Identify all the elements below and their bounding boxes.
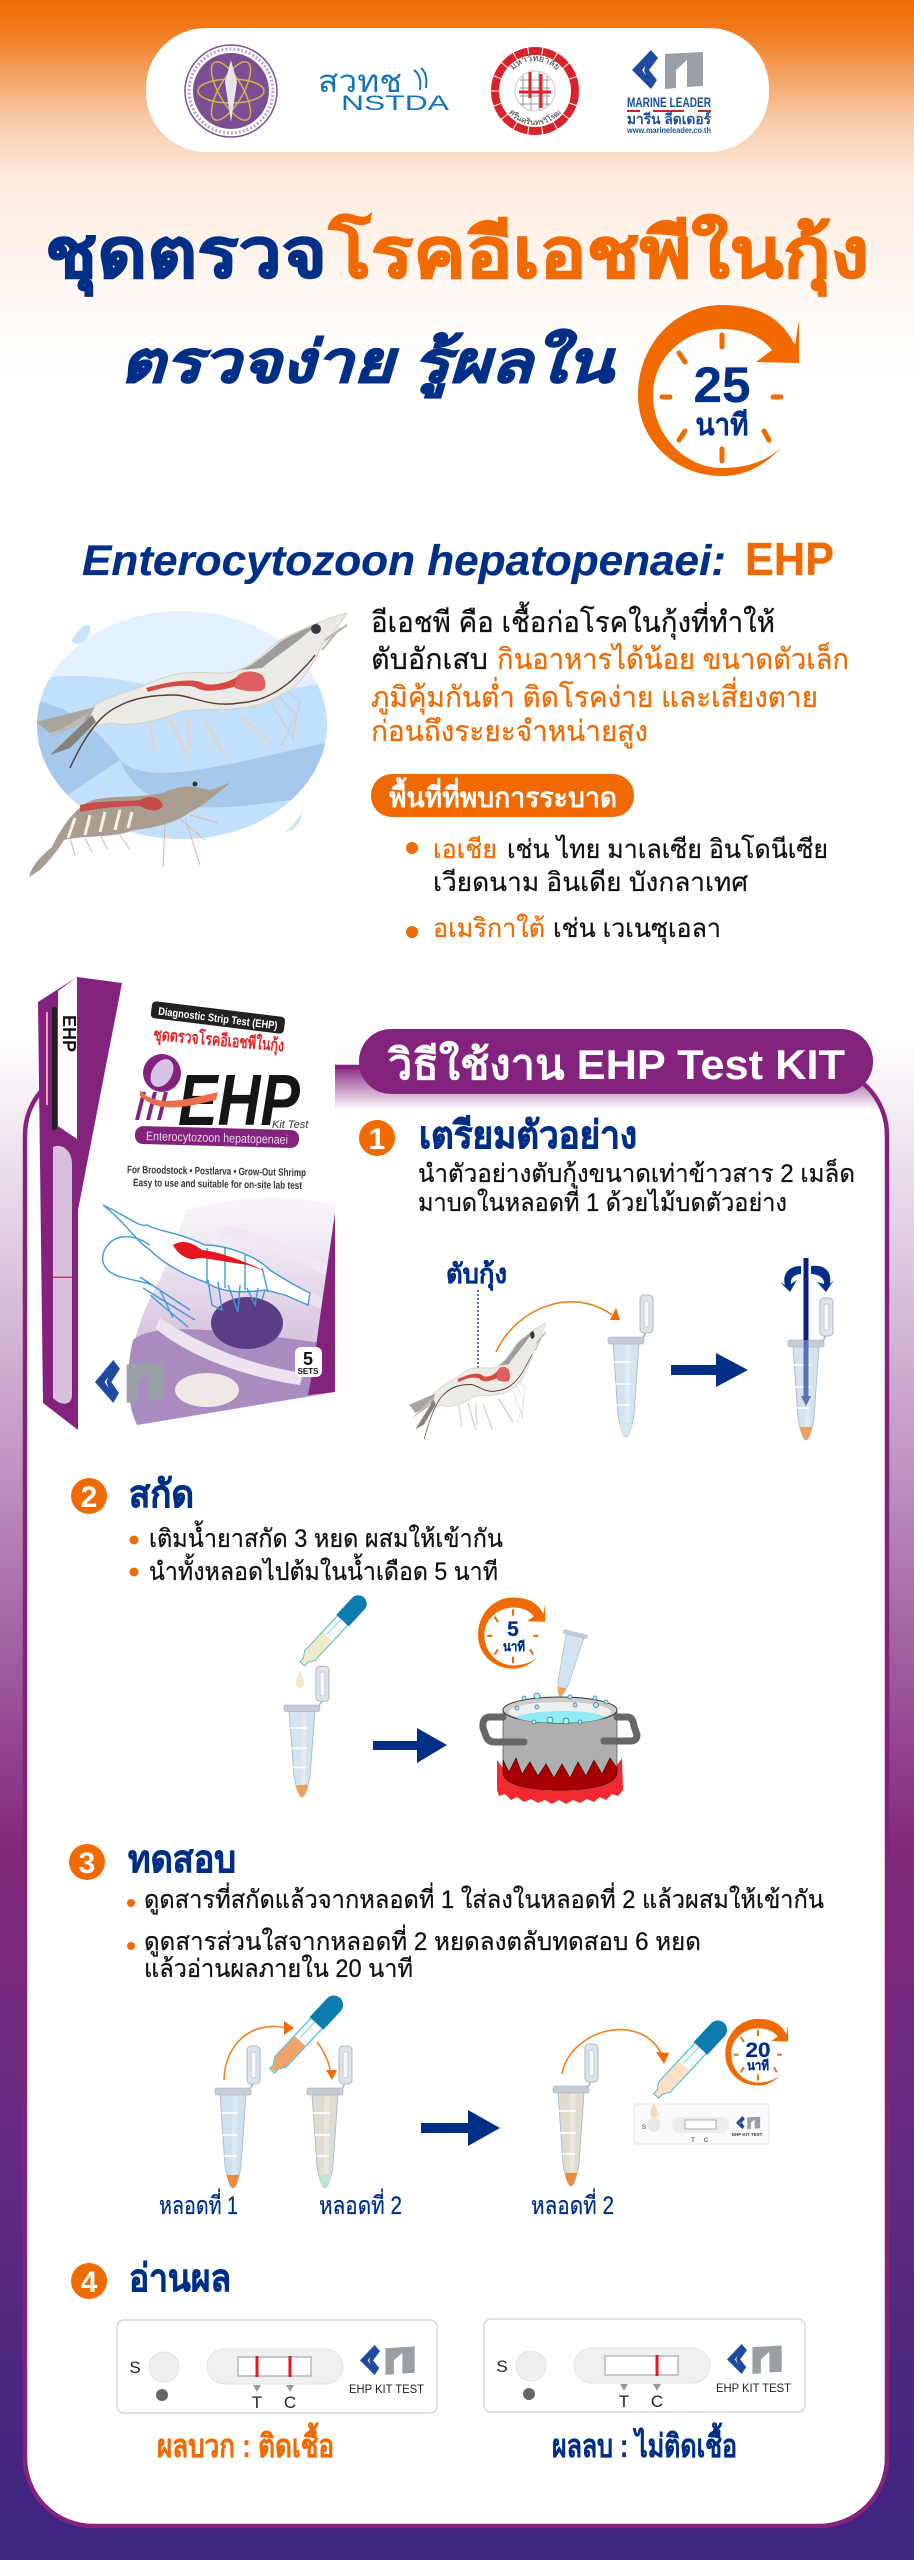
logo: Marine Leader bbox=[626, 50, 711, 135]
heading: EHP: EHP bbox=[745, 533, 834, 585]
result: negative: ผลลบ : ไม่ติดเชื้อ bbox=[552, 2422, 737, 2464]
step number 4: 4 bbox=[81, 2266, 98, 2299]
logo: ministry seal bbox=[185, 45, 277, 137]
text: EHP description: อีเอชพี คือ เชื้อก่อโรคในกุ้งที่ทำให้ bbox=[371, 601, 775, 640]
box illustration: blue shrimp outline bbox=[103, 1205, 310, 1327]
step number 1: 1 bbox=[369, 1123, 385, 1156]
illustration: small shrimp bbox=[29, 782, 230, 877]
title bbox=[45, 212, 869, 297]
arrow: navy bbox=[671, 1353, 748, 1387]
illustration: floating tube bbox=[548, 1629, 588, 1699]
illustration: water circle bbox=[37, 611, 327, 839]
box logo: EHP: Kit Test bbox=[272, 1119, 309, 1131]
panel title: how to use EHP Test KIT bbox=[359, 1029, 873, 1094]
step 1 text: นำตัวอย่างตับกุ้งขนาดเท่าข้าวสาร 2 เมล็ด bbox=[418, 1158, 855, 1189]
illustration: tube 2 result bbox=[553, 2044, 598, 2186]
test card: negative: S bbox=[496, 2357, 508, 2376]
logo: university seal bbox=[491, 47, 579, 135]
list: outbreak regions: เช่น เวเนซุเอลา bbox=[553, 913, 721, 944]
illustration: small test cassette bbox=[634, 2103, 769, 2144]
icon: 5 minute clock: นาที bbox=[503, 1639, 525, 1654]
box logo: EHP bbox=[135, 1054, 309, 1141]
step number 3 bbox=[69, 1844, 105, 1880]
logo: university seal: ศรีนครินทรวิโรฒ bbox=[509, 110, 561, 125]
illustration: tube 2 bbox=[307, 2046, 352, 2188]
step 4: read result bbox=[71, 2258, 805, 2464]
step number 1 bbox=[359, 1120, 395, 1156]
step number 2: 2 bbox=[81, 1481, 97, 1514]
step number 3: 3 bbox=[79, 1847, 95, 1880]
icon: 5 minute clock bbox=[478, 1598, 545, 1669]
step 1 text bbox=[418, 1158, 855, 1217]
illustration: tube with pestle bbox=[780, 1258, 834, 1440]
box logo: EHP: EHP bbox=[178, 1061, 301, 1141]
step 2: extract bbox=[71, 1474, 637, 1804]
step 1 text: มาบดในหลอดที่ 1 ด้วยไม้บดตัวอย่าง bbox=[418, 1185, 787, 1217]
box text: uses: Easy to use and suitable for on-site lab test bbox=[133, 1177, 303, 1192]
logo bar bbox=[146, 28, 769, 152]
icon: drop bbox=[296, 1671, 304, 1688]
text: EHP description: ภูมิคุ้มกันต่ำ ติดโรคง่าย และเสี่ยงตาย bbox=[371, 677, 818, 715]
step 1 title: เตรียมตัวอย่าง bbox=[419, 1115, 637, 1157]
list: outbreak regions: เวียดนาม อินเดีย บังกลาเทศ bbox=[433, 867, 748, 897]
logo: NSTDA: NSTDA bbox=[341, 92, 449, 115]
step 3 list: แล้วอ่านผลภายใน 20 นาที bbox=[144, 1954, 413, 1983]
subtitle: ตรวจง่าย รู้ผลใน bbox=[120, 329, 616, 399]
arrow: navy bbox=[421, 2110, 500, 2146]
step 2 list: เติมน้ำยาสกัด 3 หยด ผสมให้เข้ากัน bbox=[149, 1520, 503, 1553]
box text: uses bbox=[127, 1164, 306, 1192]
arrow: navy bbox=[373, 1728, 447, 1763]
label: tube 1: หลอดที่ 1 bbox=[159, 2188, 238, 2220]
icon: 20 minute clock: นาที bbox=[747, 2058, 769, 2073]
step 1: prepare sample bbox=[359, 1115, 855, 1440]
text: EHP description: ตับอักเสบ bbox=[371, 644, 488, 676]
badge: outbreak areas: พื้นที่ที่พบการระบาด bbox=[389, 776, 617, 813]
illustration: small test cassette: C bbox=[704, 2138, 709, 2144]
test card: positive: T bbox=[252, 2393, 262, 2412]
label: tube 2: หลอดที่ 2 bbox=[319, 2188, 402, 2220]
box badge: 5 sets: 5 bbox=[303, 1349, 313, 1369]
list: outbreak regions: เช่น ไทย มาเลเซีย อินโดนีเซีย bbox=[507, 834, 828, 864]
step 4 title: อ่านผล bbox=[129, 2258, 231, 2300]
illustration: shrimp bbox=[409, 1323, 546, 1439]
logo: Marine Leader: MARINE LEADER bbox=[627, 94, 711, 110]
icon: 25 minute clock bbox=[638, 305, 799, 476]
heading: EHP: Enterocytozoon hepatopenaei: bbox=[82, 537, 726, 585]
step 2 list bbox=[130, 1520, 503, 1586]
panel title: how to use EHP Test KIT: วิธีใช้งาน EHP Test KIT bbox=[387, 1040, 845, 1088]
panel: how to use bbox=[25, 1067, 887, 2526]
illustration: dropper bbox=[649, 2017, 731, 2102]
list: outbreak regions: เอเชีย bbox=[433, 834, 497, 864]
illustration: dropper bbox=[296, 1592, 370, 1670]
test card: negative: T bbox=[619, 2392, 629, 2411]
step 3: test bbox=[69, 1839, 824, 2220]
test card: positive: C bbox=[284, 2393, 296, 2412]
box text: uses: For Broodstock • Postlarva • Grow-Out Shrimp bbox=[127, 1164, 306, 1179]
logo: NSTDA: สวทช bbox=[318, 64, 402, 99]
result: positive: ผลบวก : ติดเชื้อ bbox=[157, 2422, 334, 2464]
box label: diagnostic pill: Diagnostic Strip Test (EHP) bbox=[157, 1006, 278, 1032]
step 2 title: สกัด bbox=[129, 1474, 194, 1516]
arrow: tube 1 to dropper bbox=[224, 2021, 294, 2080]
logo: NSTDA bbox=[318, 64, 449, 115]
test card: negative: C bbox=[651, 2392, 663, 2411]
test card: positive: EHP KIT TEST bbox=[349, 2382, 425, 2396]
illustration: small test cassette: EHP KIT TEST bbox=[732, 2132, 763, 2137]
icon: 25 minute clock: นาที bbox=[696, 409, 748, 442]
text: EHP description: กินอาหารได้น้อย ขนาดตัวเล็ก bbox=[497, 641, 849, 676]
illustration: boiling pot bbox=[483, 1693, 637, 1804]
illustration: small test cassette: S bbox=[642, 2125, 646, 2131]
illustration: tube bbox=[284, 1666, 329, 1797]
illustration: large shrimp bbox=[36, 613, 347, 768]
arrow: dropper to tube 2 bbox=[317, 2042, 337, 2080]
product box bbox=[38, 977, 335, 1430]
logo: university seal: มหาวิทยาลัย bbox=[510, 54, 560, 70]
test card: negative bbox=[484, 2319, 805, 2412]
title: ชุดตรวจ bbox=[45, 215, 327, 297]
step 2 list: นำทั้งหลอดไปต้มในน้ำเดือด 5 นาที bbox=[149, 1553, 498, 1586]
icon: 20 minute clock: 20 bbox=[746, 2039, 770, 2062]
box label: thai name: ชุดตรวจโรคอีเอชพีในกุ้ง bbox=[153, 1024, 285, 1056]
box logo: Marine Leader bbox=[95, 1360, 163, 1403]
icon: 25 minute clock: 25 bbox=[694, 357, 750, 413]
text: EHP description bbox=[371, 601, 849, 749]
illustration: open tube bbox=[608, 1295, 653, 1437]
test card: positive: S bbox=[129, 2358, 141, 2377]
arrow: tube to cassette bbox=[562, 2030, 669, 2074]
logo: Marine Leader: www.marineleader.co.th bbox=[626, 126, 711, 135]
box badge: 5 sets bbox=[295, 1347, 322, 1377]
text: EHP description: ก่อนถึงระยะจำหน่ายสูง bbox=[371, 716, 648, 749]
step 3 list bbox=[127, 1882, 824, 1983]
arrow: curved orange bbox=[496, 1302, 620, 1352]
title: โรคอีเอชพีในกุ้ง bbox=[328, 212, 869, 297]
badge: outbreak areas bbox=[371, 774, 634, 817]
icon: 5 minute clock: 5 bbox=[507, 1618, 519, 1641]
list: outbreak regions bbox=[406, 834, 828, 944]
label: hepatopancreas: ตับกุ้ง bbox=[446, 1259, 507, 1291]
step number 2 bbox=[71, 1478, 107, 1514]
box artwork bbox=[128, 1198, 335, 1425]
step number 4 bbox=[71, 2263, 107, 2299]
illustration: dropper with sample bbox=[265, 1992, 347, 2077]
step 3 list: ดูดสารที่สกัดแล้วจากหลอดที่ 1 ใส่ลงในหลอดที่ 2 แล้วผสมให้เข้ากัน bbox=[144, 1882, 824, 1915]
label: hepatopancreas bbox=[446, 1259, 507, 1377]
icon: 20 minute clock bbox=[725, 2019, 788, 2086]
illustration: small test cassette: T bbox=[691, 2138, 695, 2144]
box badge: 5 sets: SETS bbox=[298, 1367, 319, 1376]
list: outbreak regions: อเมริกาใต้ bbox=[433, 913, 545, 943]
test card: negative: EHP KIT TEST bbox=[716, 2381, 792, 2395]
illustration: tube 1 bbox=[215, 2046, 260, 2188]
step 3 list: ดูดสารส่วนใสจากหลอดที่ 2 หยดลงตลับทดสอบ 6 หยด bbox=[144, 1924, 701, 1957]
label: tube 2 result: หลอดที่ 2 bbox=[531, 2188, 614, 2220]
test card: positive bbox=[117, 2320, 437, 2413]
logo: Marine Leader: มารีน ลีดเดอร์ bbox=[627, 111, 711, 127]
step 3 title: ทดสอบ bbox=[128, 1839, 236, 1881]
product box: EHP bbox=[59, 1015, 79, 1052]
box label: species pill: Enterocytozoon hepatopenaei bbox=[146, 1129, 288, 1147]
